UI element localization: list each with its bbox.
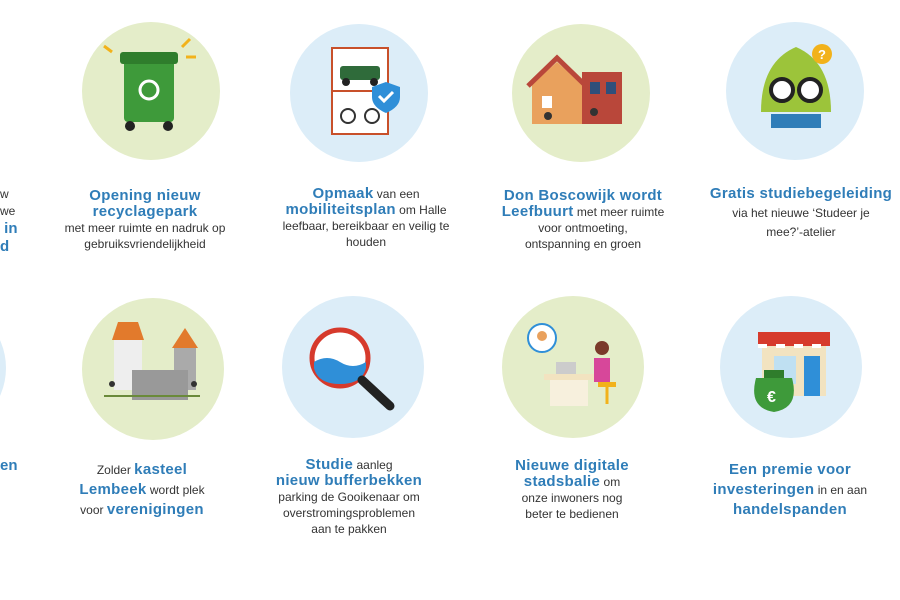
text: stadsbalie: Nieuwe digitale: [515, 457, 629, 474]
icon: woman at desk: [527, 323, 616, 406]
text: bufferbekken: Studie aanleg: [305, 456, 393, 473]
icon: green bin: [103, 38, 196, 131]
text: premie handelspanden: investeringen in en aan: [713, 481, 867, 498]
panel: studiebegeleiding: [726, 22, 864, 160]
text: studiebegeleiding: Gratis studiebegeleiding: [710, 185, 892, 202]
text: premie handelspanden: [713, 461, 867, 518]
partial text left row1: we: [0, 204, 15, 218]
text: mobiliteitsplan: leefbaar, bereikbaar en veilig te: [283, 219, 449, 233]
partial text left row2: en: [0, 457, 18, 474]
text: recyclagepark: [65, 187, 225, 251]
text: mobiliteitsplan: Opmaak van een: [312, 185, 420, 202]
text: bufferbekken: overstromingsproblemen: [283, 506, 415, 520]
panel: Don Boscowijk: [512, 24, 650, 162]
icon: green mascot: ?: [818, 47, 826, 62]
panel: mobiliteitsplan: [290, 24, 428, 162]
partial text left row1: [0, 187, 18, 255]
text: Don Boscowijk: Don Boscowijk wordt: [504, 187, 662, 204]
icon: shop and money bag: €: [767, 389, 776, 406]
text: recyclagepark: recyclagepark: [93, 203, 197, 220]
icon: shop and money bag: [754, 332, 830, 412]
text: mobiliteitsplan: houden: [346, 235, 386, 249]
text: Don Boscowijk: voor ontmoeting,: [538, 221, 628, 235]
text: kasteel Lembeek: voor verenigingen: [80, 501, 204, 518]
text: studiebegeleiding: [710, 185, 892, 239]
text: premie handelspanden: Een premie voor: [729, 461, 851, 478]
partial text left row1: w: [0, 187, 9, 201]
text: stadsbalie: beter te bedienen: [525, 507, 619, 521]
text: studiebegeleiding: via het nieuwe ‘Studeer je: [732, 206, 870, 220]
text: mobiliteitsplan: [283, 185, 449, 249]
panel: stadsbalie: [502, 296, 644, 438]
text: bufferbekken: parking de Gooikenaar om: [278, 490, 420, 504]
text: recyclagepark: Opening nieuw: [89, 187, 201, 204]
icon: green mascot: [761, 44, 832, 128]
text: Don Boscowijk: [502, 187, 664, 251]
text: recyclagepark: gebruiksvriendelijkheid: [84, 237, 206, 251]
text: studiebegeleiding: mee?’-atelier: [766, 225, 836, 239]
text: Don Boscowijk: Leefbuurt met meer ruimte: [502, 203, 664, 220]
text: recyclagepark: met meer ruimte en nadruk op: [65, 221, 225, 235]
text: stadsbalie: [515, 457, 629, 521]
icon: houses: [526, 54, 622, 124]
icon: castle: [104, 322, 200, 400]
icon: magnifier: [310, 328, 394, 410]
partial circle left row2: [0, 300, 6, 436]
text: bufferbekken: [276, 456, 422, 536]
text: bufferbekken: aan te pakken: [311, 522, 387, 536]
partial text left row1: d: [0, 238, 9, 255]
panel: premie handelspanden: [720, 296, 862, 438]
text: kasteel Lembeek: [79, 461, 205, 518]
panel: kasteel Lembeek: [82, 298, 224, 440]
text: stadsbalie: onze inwoners nog: [522, 491, 622, 505]
text: bufferbekken: nieuw bufferbekken: [276, 472, 422, 489]
panel: recyclagepark: [82, 22, 220, 160]
text: kasteel Lembeek: Lembeek wordt plek: [79, 481, 205, 498]
icon: car bike sign: [331, 47, 400, 135]
text: stadsbalie: stadsbalie om: [524, 473, 620, 490]
text: Don Boscowijk: ontspanning en groen: [525, 237, 641, 251]
text: premie handelspanden: handelspanden: [733, 501, 847, 518]
text: mobiliteitsplan: mobiliteitsplan om Halle: [285, 201, 447, 218]
text: kasteel Lembeek: Zolder kasteel: [97, 461, 187, 478]
partial text left row1: in: [4, 220, 18, 237]
panel: bufferbekken: [282, 296, 424, 438]
